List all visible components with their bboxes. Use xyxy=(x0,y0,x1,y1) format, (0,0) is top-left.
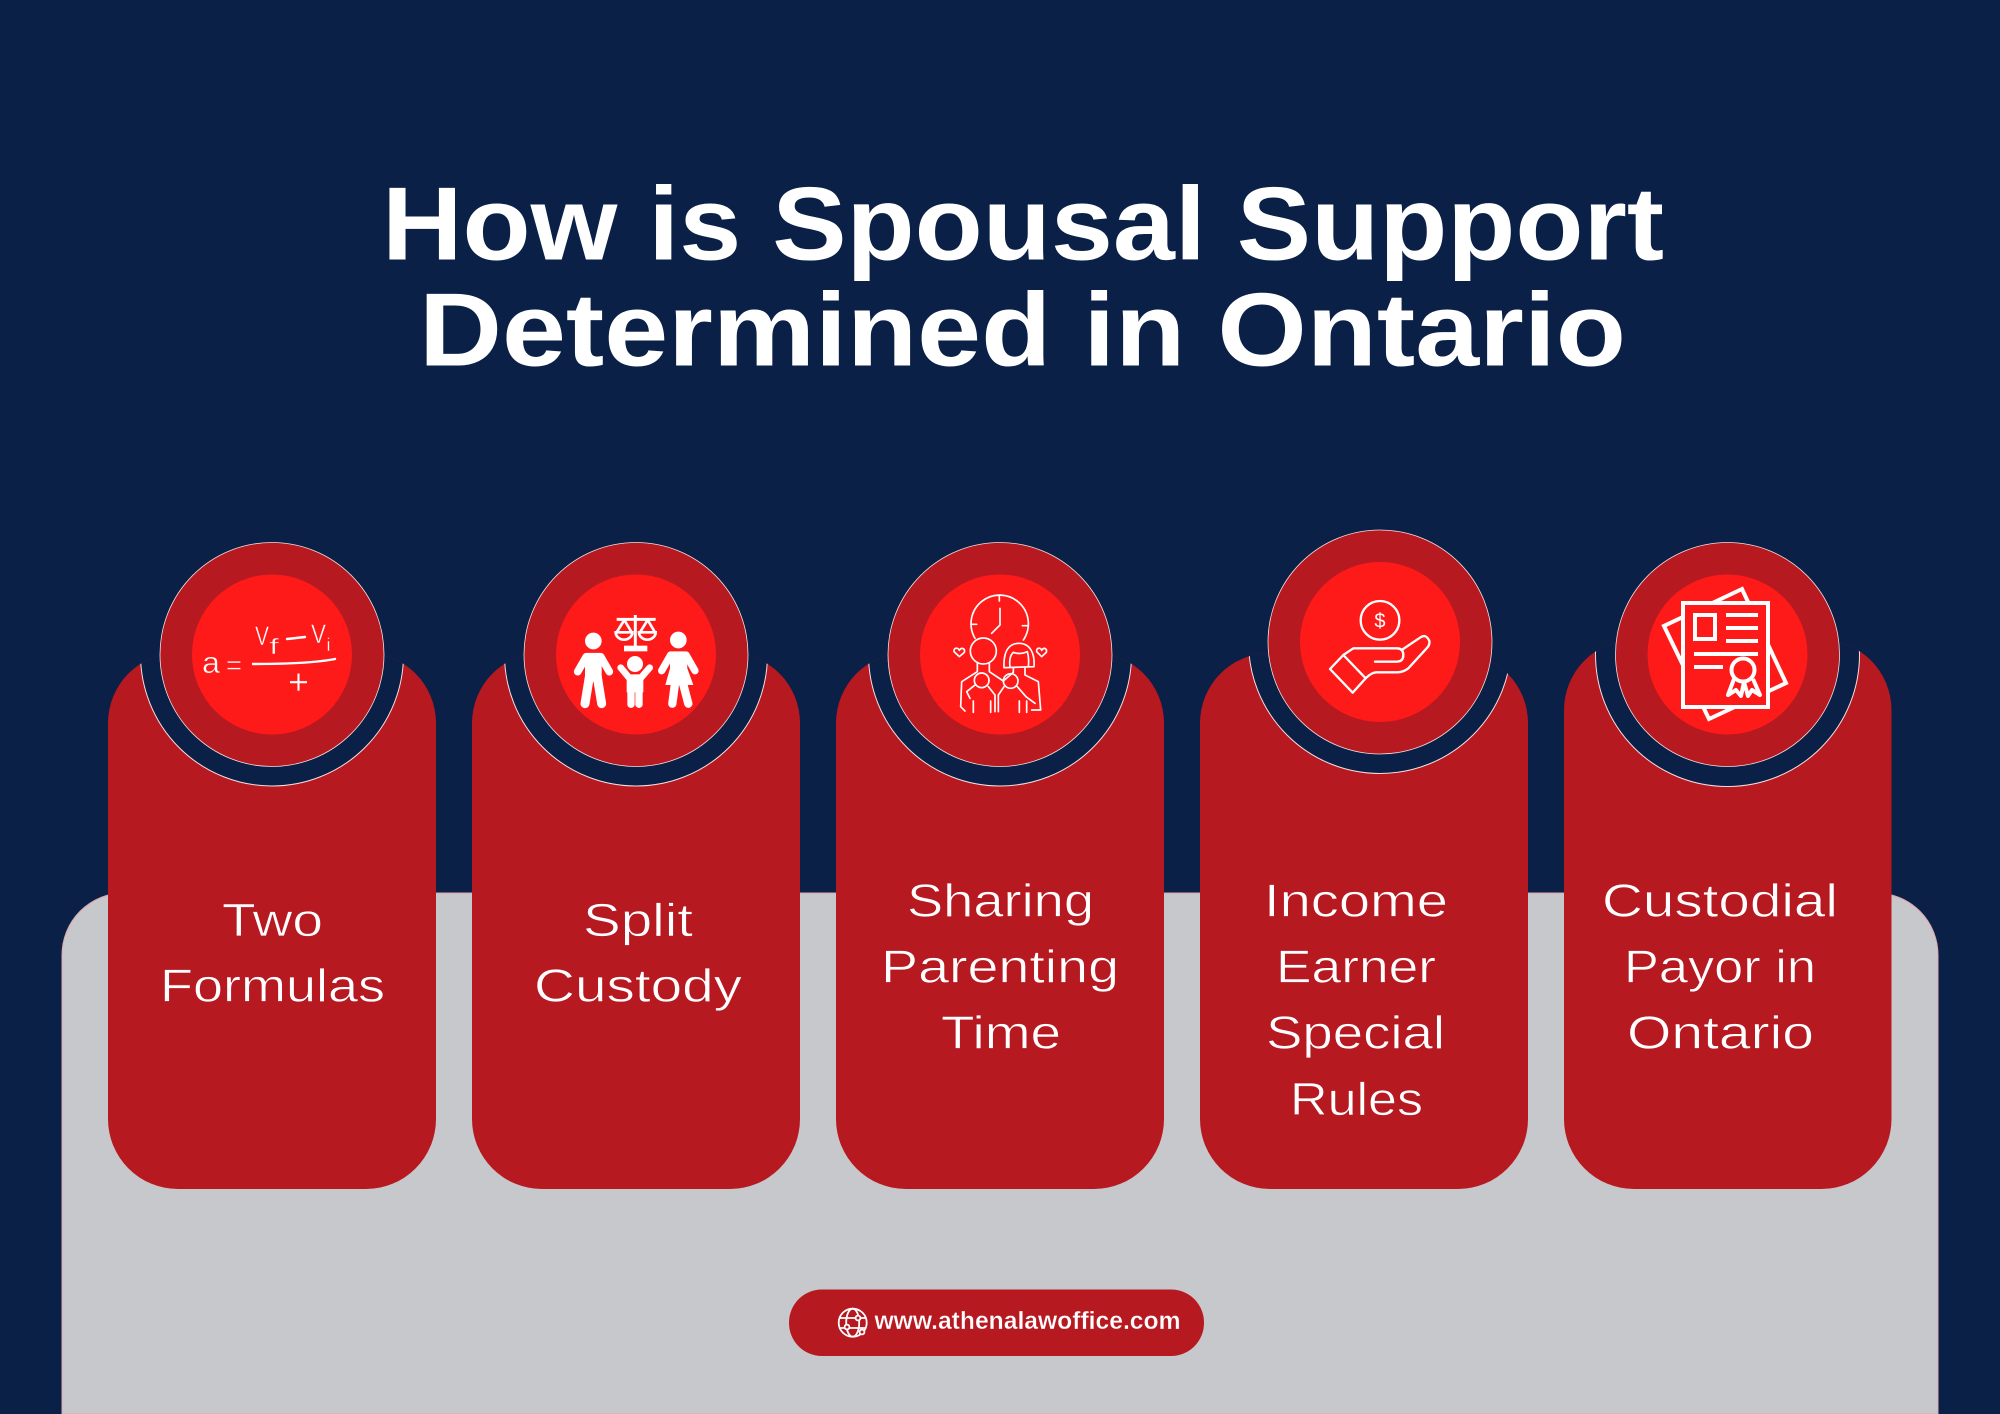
label: two formulas: Two xyxy=(222,894,323,946)
card 2: split custody xyxy=(472,523,800,1189)
icon: family and scales xyxy=(578,615,695,704)
icon: acceleration formula: = xyxy=(226,650,242,680)
panel: grey background xyxy=(62,893,1938,1414)
card 5: custodial payor in ontario xyxy=(1564,522,1892,1189)
title xyxy=(382,166,1664,388)
label: custodial payor in ontario xyxy=(1602,874,1838,1058)
icon: acceleration formula: f xyxy=(269,634,280,659)
icon: hand holding coin xyxy=(1330,601,1429,693)
label: two formulas xyxy=(160,894,385,1012)
label: income earner special rules: Rules xyxy=(1290,1073,1423,1125)
label: sharing parenting time: Parenting xyxy=(881,940,1119,992)
card 1: two formulas xyxy=(108,523,436,1189)
label: split custody xyxy=(534,894,743,1012)
icon: acceleration formula xyxy=(202,619,335,702)
label: income earner special rules: Income xyxy=(1264,874,1448,926)
icon: acceleration formula: V xyxy=(311,619,326,649)
label: income earner special rules: Earner xyxy=(1276,940,1436,992)
title: How is Spousal Support xyxy=(382,166,1664,282)
card 4: income earner special rules xyxy=(1200,510,1528,1189)
label: custodial payor in ontario: Payor in xyxy=(1624,940,1816,992)
icon: acceleration formula: V xyxy=(255,621,269,651)
label: custodial payor in ontario: Ontario xyxy=(1627,1006,1814,1058)
icon: family with clock xyxy=(954,595,1047,712)
label: two formulas: Formulas xyxy=(160,960,385,1012)
icon: hand holding coin: $ xyxy=(1374,610,1386,632)
card 3: sharing parenting time xyxy=(836,523,1164,1189)
website pill xyxy=(789,1290,1204,1356)
label: split custody: Split xyxy=(583,894,693,946)
website url: www.athenalawoffice.com xyxy=(874,1307,1180,1335)
icon: acceleration formula: a xyxy=(202,645,221,680)
icon: acceleration formula: + xyxy=(288,661,309,702)
title: Determined in Ontario xyxy=(419,272,1626,388)
label: custodial payor in ontario: Custodial xyxy=(1602,874,1838,926)
icon: globe xyxy=(839,1309,867,1337)
label: income earner special rules xyxy=(1264,874,1448,1125)
label: income earner special rules: Special xyxy=(1266,1006,1445,1058)
label: split custody: Custody xyxy=(534,960,743,1012)
label: sharing parenting time: Time xyxy=(941,1006,1061,1058)
icon: certificate documents xyxy=(1664,589,1786,719)
label: sharing parenting time xyxy=(881,874,1119,1058)
label: sharing parenting time: Sharing xyxy=(907,874,1094,926)
icon: acceleration formula: i xyxy=(326,635,331,655)
